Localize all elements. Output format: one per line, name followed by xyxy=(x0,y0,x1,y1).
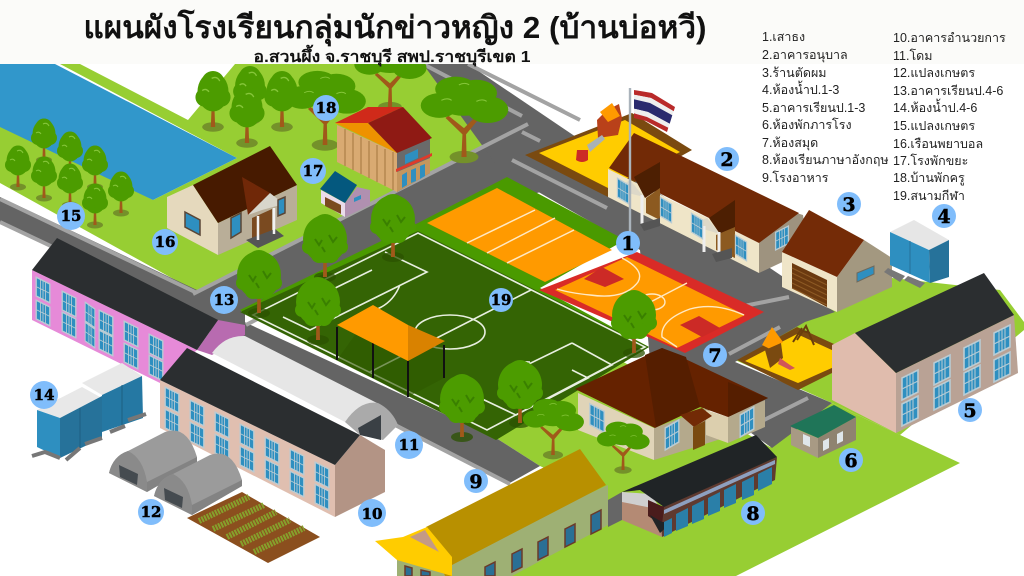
legend column 1: 4.ห้องน้ำป.1-3 xyxy=(762,80,839,97)
legend column 2: 15.แปลงเกษตร xyxy=(893,119,975,133)
badge 3 xyxy=(837,192,861,216)
badge 14: 14 xyxy=(34,386,54,404)
upper trees xyxy=(195,41,508,163)
badge 7 xyxy=(703,343,727,367)
legend column 2: 11.โดม xyxy=(893,48,933,63)
badge 11 xyxy=(395,431,423,459)
building 12: greenhouse domes xyxy=(109,430,242,515)
sports field 19 xyxy=(240,177,649,440)
legend column 1: 8.ห้องเรียนภาษาอังกฤษ xyxy=(762,153,889,167)
badge 7: 7 xyxy=(708,345,722,367)
badge 6: 6 xyxy=(844,450,858,472)
badge 1 xyxy=(616,231,640,255)
number badges xyxy=(30,95,982,527)
badge 9: 9 xyxy=(469,471,483,493)
badge 17 xyxy=(300,158,326,184)
building 16: nurse house xyxy=(167,146,297,255)
legend column 2: 12.แปลงเกษตร xyxy=(893,66,975,80)
badge 16: 16 xyxy=(155,233,175,251)
building 7: library xyxy=(575,348,768,460)
building 14: toilets xyxy=(32,363,146,460)
legend column 1: 1.เสาธง xyxy=(762,30,805,44)
field trees xyxy=(236,194,657,474)
badge 15 xyxy=(57,202,85,230)
tent canopy xyxy=(337,305,445,397)
badge 13 xyxy=(210,286,238,314)
badge 12: 12 xyxy=(141,503,161,521)
building 2: kindergarten xyxy=(608,133,808,273)
badge 11: 11 xyxy=(399,436,419,454)
volleyball court xyxy=(427,188,612,282)
building 5: classrooms grade 1-3 xyxy=(832,273,1018,433)
legend column 2: 10.อาคารอำนวยการ xyxy=(893,31,1006,45)
building 9: canteen xyxy=(375,449,622,576)
badge 2 xyxy=(715,147,739,171)
flag pole and Thai flag xyxy=(630,88,675,234)
field lines xyxy=(253,233,645,430)
title: แผนผังโรงเรียนกลุ่มนักข่าวหญิง 2 (บ้านบ่อหวี) xyxy=(84,9,706,47)
badge 18: 18 xyxy=(316,99,336,117)
farm plot xyxy=(187,492,320,563)
legend column 1: 6.ห้องพักภารโรง xyxy=(762,117,852,132)
badge 4 xyxy=(932,204,956,228)
badge 15: 15 xyxy=(61,207,81,225)
badge 5: 5 xyxy=(963,400,977,422)
badge 5 xyxy=(958,398,982,422)
badge 12 xyxy=(138,499,164,525)
badge 10: 10 xyxy=(362,505,382,523)
top header background xyxy=(0,0,1024,64)
badge 19: 19 xyxy=(491,291,511,309)
badge 8 xyxy=(741,501,765,525)
badge 3: 3 xyxy=(842,194,856,216)
roads xyxy=(0,64,835,484)
badge 6 xyxy=(839,448,863,472)
legend column 2: 13.อาคารเรียนป.4-6 xyxy=(893,84,1003,98)
northeast grass xyxy=(735,278,1024,435)
legend column 2: 19.สนามกีฬา xyxy=(893,189,965,203)
badge 1: 1 xyxy=(621,233,635,255)
playground south xyxy=(737,326,834,390)
building 11: dome xyxy=(212,336,398,440)
legend column 2: 18.บ้านพักครู xyxy=(893,171,965,186)
legend column 1: 7.ห้องสมุด xyxy=(762,136,818,151)
badge 16 xyxy=(152,229,178,255)
building 4: toilets xyxy=(884,220,949,288)
badge 13: 13 xyxy=(214,291,234,309)
legend column 1: 9.โรงอาหาร xyxy=(762,170,829,185)
basketball court xyxy=(539,252,764,353)
badge 8: 8 xyxy=(746,503,760,525)
badge 9 xyxy=(464,469,488,493)
legend column 1: 2.อาคารอนุบาล xyxy=(762,48,848,63)
legend column 1: 3.ร้านตัดผม xyxy=(762,66,827,80)
building 3: barber shop xyxy=(782,210,892,312)
legend column 2: 17.โรงพักขยะ xyxy=(893,153,968,168)
lake xyxy=(0,64,237,200)
badge 19 xyxy=(489,288,513,312)
lake-side farm trees xyxy=(5,118,134,228)
building 8: English classroom xyxy=(622,435,777,537)
badge 18 xyxy=(313,95,339,121)
badge 4: 4 xyxy=(937,206,951,228)
legend column 1 xyxy=(762,30,889,185)
building 10: administration xyxy=(160,348,385,517)
legend column 1: 5.อาคารเรียนป.1-3 xyxy=(762,101,865,115)
northwest grass xyxy=(0,64,530,292)
badge 2: 2 xyxy=(720,149,734,171)
legend column 2: 14.ห้องน้ำป.4-6 xyxy=(893,98,977,115)
building 18: teacher house xyxy=(335,107,432,192)
building 6: janitor room xyxy=(790,405,856,458)
legend column 2 xyxy=(893,31,1006,203)
building 13: classrooms grade 4-6 xyxy=(32,238,245,383)
subtitle: อ.สวนผึ้ง จ.ราชบุรี สพป.ราชบุรีเขต 1 xyxy=(254,44,531,67)
southeast grass xyxy=(470,360,960,576)
playground north xyxy=(525,103,692,197)
badge 17: 17 xyxy=(303,162,323,180)
badge 10 xyxy=(358,499,386,527)
badge 14 xyxy=(30,381,58,409)
building 17: garbage house xyxy=(320,171,370,217)
legend column 2: 16.เรือนพยาบอล xyxy=(893,137,983,151)
